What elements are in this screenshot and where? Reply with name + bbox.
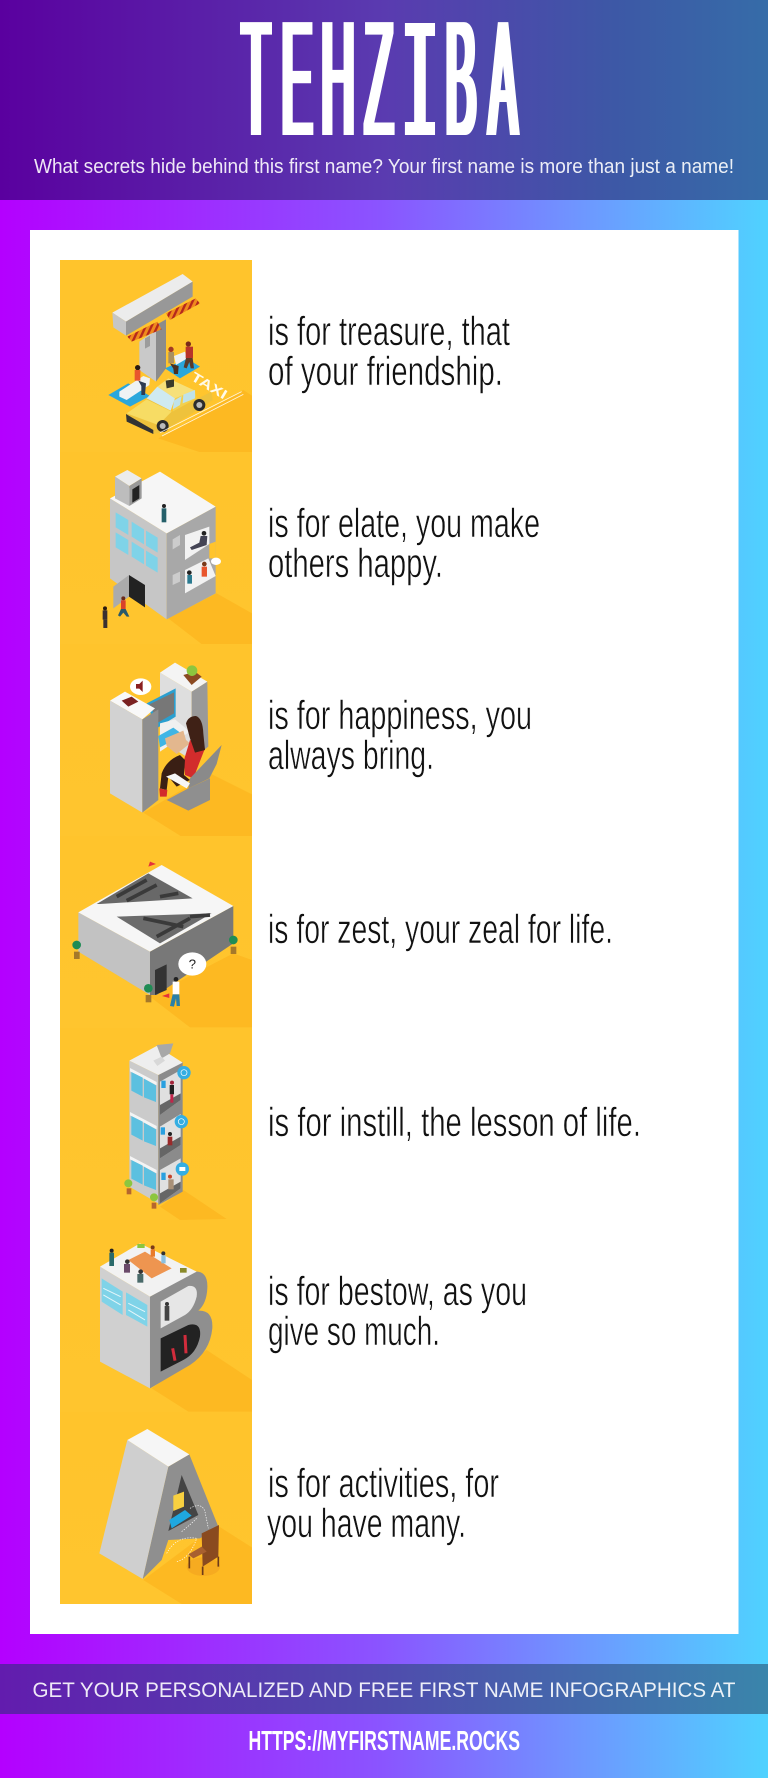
standing man — [184, 341, 194, 368]
text: letter A — [267, 1460, 499, 1546]
header band — [0, 0, 768, 200]
text: letter Z: is for zest, your zeal for life. — [268, 906, 613, 952]
text: letter E — [268, 500, 540, 586]
taxi car — [126, 378, 213, 434]
text: letter T: is for treasure, that — [268, 308, 510, 354]
tile E: office building — [60, 452, 252, 644]
text: letter E: others happy. — [268, 540, 443, 586]
title — [242, 0, 517, 187]
subtitle: What secrets hide behind this first name? Your first name is more than just a name! — [34, 156, 734, 178]
footer band: GET YOUR PERSONALIZED AND FREE FIRST NAME INFOGRAPHICS AT — [32, 1678, 736, 1702]
tile I: tower — [60, 1028, 252, 1220]
text: letter A: you have many. — [267, 1500, 466, 1546]
seated man left — [135, 365, 146, 395]
title: I — [402, 0, 438, 187]
tile Z: maze — [60, 836, 252, 1028]
white content panel — [30, 230, 738, 1634]
text: letter B: give so much. — [268, 1308, 440, 1354]
text: letter T: of your friendship. — [268, 348, 503, 394]
text: letter B — [268, 1268, 527, 1354]
text: letter H — [268, 692, 532, 778]
text: letter A: is for activities, for — [268, 1460, 499, 1506]
tile B: meeting rooftop — [60, 1220, 252, 1412]
tile H: desk worker — [60, 644, 252, 836]
text: letter B: is for bestow, as you — [268, 1268, 527, 1314]
text: letter T — [268, 308, 510, 394]
footer url: HTTPS://MYFIRSTNAME.ROCKS — [248, 1725, 520, 1756]
text: letter E: is for elate, you make — [268, 500, 540, 546]
question mark bubble: ? — [189, 956, 196, 971]
tile A: sitting room — [60, 1412, 252, 1604]
seated man middle — [168, 347, 179, 374]
text: letter H: always bring. — [268, 732, 434, 778]
taxi lettering: TAXI — [188, 369, 230, 402]
tile T: taxi building — [60, 260, 252, 452]
footer band — [0, 1664, 768, 1714]
text: letter H: is for happiness, you — [268, 692, 532, 738]
